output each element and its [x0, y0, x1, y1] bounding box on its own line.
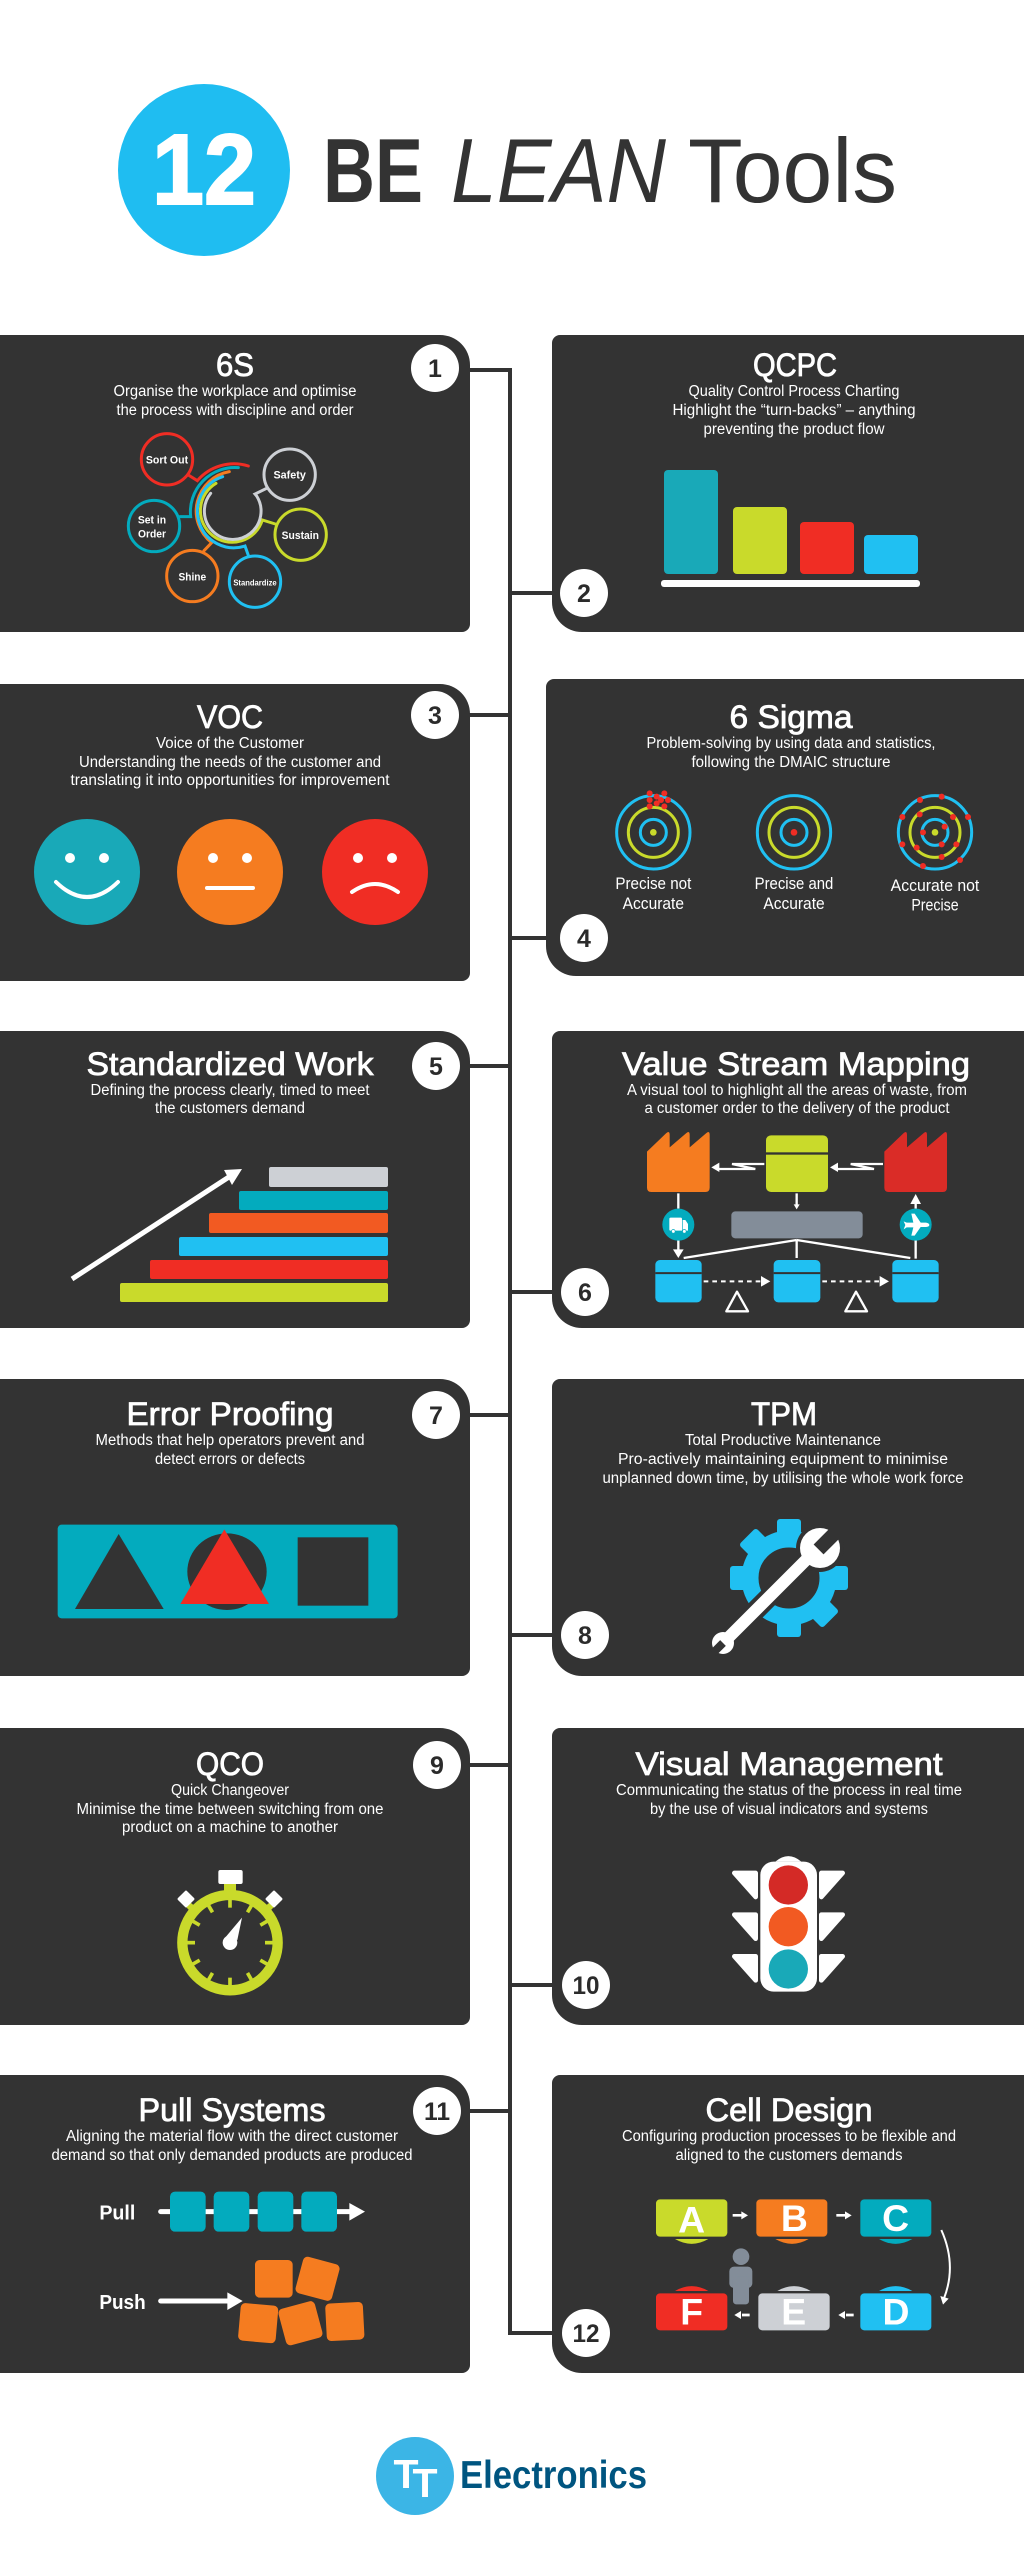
heading: Visual Management: Visual Management — [636, 1746, 943, 1782]
heading: BE LEAN Tools: BE — [323, 121, 423, 222]
icon: sad face — [322, 819, 428, 925]
badge 6 — [561, 1268, 609, 1316]
bar chart — [661, 470, 920, 587]
description: Pull Systems: demand so that only demanded products are produced — [52, 2147, 412, 2164]
logo mark: T — [393, 2451, 419, 2497]
badge 10 — [562, 1961, 610, 2009]
panel: QCPC — [552, 335, 1024, 632]
icon: happy face — [34, 819, 140, 925]
diagram: value stream map — [647, 1132, 947, 1311]
badge 9 — [413, 1741, 461, 1789]
heading: Cell Design: Cell Design — [706, 2092, 872, 2128]
panel: Cell Design — [552, 2075, 1024, 2373]
arrow: rising — [72, 1169, 242, 1279]
description: Error Proofing: detect errors or defects — [155, 1451, 305, 1468]
diagram: 6S wheel: Sort Out — [146, 455, 188, 467]
description: TPM: unplanned down time, by utilising the whole work force — [602, 1470, 964, 1487]
target: precise and accurate — [755, 796, 833, 913]
heading: QCO: QCO — [196, 1746, 264, 1782]
description: TPM: Total Productive Maintenance — [685, 1432, 881, 1449]
panel: 6 Sigma — [546, 679, 1024, 976]
icon: stopwatch — [177, 1870, 283, 1990]
badge 11: 11 — [424, 2098, 450, 2126]
description: QCO: Quick Changeover — [171, 1782, 289, 1799]
target: precise not accurate — [615, 790, 692, 913]
diagram: 6S wheel — [128, 434, 326, 607]
heading: 6S: 6S — [216, 347, 254, 383]
badge 9: 9 — [430, 1752, 444, 1780]
badge 7: 7 — [429, 1402, 443, 1430]
badge 12 — [562, 2309, 610, 2357]
description: 6S — [114, 383, 356, 419]
badge 5 — [412, 1042, 460, 1090]
diagram: pull row — [99, 2192, 365, 2232]
description: Cell Design: Configuring production processes to be flexible and — [622, 2128, 956, 2145]
target: precise and accurate: Accurate — [763, 894, 825, 913]
heading: Error Proofing: Error Proofing — [126, 1396, 334, 1432]
description: Error Proofing: Methods that help operators prevent and — [96, 1432, 364, 1449]
description: Standardized Work — [90, 1082, 370, 1117]
description: Value Stream Mapping: A visual tool to highlight all the areas of waste, from — [627, 1082, 967, 1099]
panel: Visual Management — [552, 1728, 1024, 2025]
diagram: 6S wheel: Set in — [138, 514, 166, 526]
badge 10: 10 — [572, 1972, 600, 2000]
badge 2: 2 — [577, 580, 591, 608]
heading: Standardized Work: Standardized Work — [86, 1046, 375, 1082]
description: Standardized Work: the customers demand — [155, 1100, 305, 1117]
diagram: 6S wheel: Shine — [178, 571, 206, 583]
box dividers — [655, 1270, 939, 1276]
target: accurate not precise: Precise — [911, 896, 959, 915]
panel: 6S — [0, 335, 470, 632]
description: Visual Management — [616, 1782, 962, 1818]
badge 8 — [561, 1611, 609, 1659]
description: 6 Sigma: Problem-solving by using data and statistics, — [646, 735, 936, 752]
panel: Error Proofing — [0, 1379, 470, 1676]
description: QCO — [76, 1782, 384, 1836]
logo mark: T — [412, 2460, 438, 2506]
staircase bars — [120, 1167, 388, 1302]
panel: VOC — [0, 684, 470, 981]
arrowheads — [734, 2211, 949, 2319]
shape sorter diagram — [58, 1525, 398, 1618]
diagram: push row — [99, 2256, 365, 2346]
badge 11 — [413, 2087, 461, 2135]
icon: supplier factory — [647, 1132, 710, 1192]
description: Cell Design: aligned to the customers demands — [676, 2147, 903, 2164]
diagram: 6S wheel: Order — [138, 528, 167, 540]
target: accurate not precise: Accurate not — [891, 876, 980, 895]
description: QCPC — [672, 383, 916, 438]
badge 12: 12 — [572, 2320, 600, 2348]
heading: QCPC: QCPC — [753, 347, 837, 383]
heading: VOC: VOC — [197, 699, 263, 735]
title block — [118, 84, 897, 256]
logo mark — [376, 2437, 454, 2515]
target: precise and accurate: Precise and — [755, 874, 833, 893]
description: VOC — [70, 735, 390, 789]
description: Value Stream Mapping — [627, 1082, 967, 1117]
target: accurate not precise — [891, 794, 980, 915]
description: QCPC: Quality Control Process Charting — [688, 383, 900, 400]
icon: traffic light — [734, 1856, 843, 1992]
info flow arrows — [678, 1164, 916, 1281]
panel: Pull Systems — [0, 2075, 470, 2373]
station pedestals — [675, 2239, 912, 2291]
badge 4: 4 — [577, 925, 591, 953]
stations A to F: A — [678, 2199, 705, 2241]
panel: Value Stream Mapping — [552, 1031, 1024, 1328]
connector timeline — [468, 368, 554, 2335]
description: Visual Management: by the use of visual indicators and systems — [650, 1801, 928, 1818]
description: QCPC: preventing the product flow — [704, 421, 885, 438]
description: 6S: the process with discipline and order — [116, 402, 354, 419]
description: QCPC: Highlight the “turn-backs” – anything — [672, 402, 916, 419]
icon: customer factory — [884, 1132, 947, 1192]
diagram: 6S wheel: Sustain — [282, 530, 319, 542]
heading: Value Stream Mapping: Value Stream Mapping — [622, 1046, 970, 1082]
heading: BE LEAN Tools: LEAN — [451, 121, 666, 222]
description: TPM: Pro-actively maintaining equipment to minimise — [618, 1451, 948, 1468]
diagram: 6S wheel: Standardize — [233, 577, 277, 587]
target: precise not accurate: Accurate — [623, 894, 684, 913]
description: VOC: Voice of the Customer — [156, 735, 304, 752]
badge 8: 8 — [578, 1622, 592, 1650]
description: Error Proofing — [96, 1432, 364, 1468]
diagram: push row: Push — [99, 2292, 146, 2314]
stations A to F: F — [680, 2291, 703, 2333]
process boxes — [655, 1260, 939, 1302]
arrowheads — [673, 1163, 921, 1287]
description: VOC: Understanding the needs of the customer and — [79, 754, 381, 771]
heading: Pull Systems: Pull Systems — [138, 2092, 326, 2128]
flow arrows — [733, 2215, 950, 2315]
stations A to F: B — [781, 2197, 808, 2239]
icon: truck — [662, 1209, 694, 1241]
icon: gear and wrench — [710, 1519, 848, 1656]
icon: neutral face — [177, 819, 283, 925]
panel: TPM — [552, 1379, 1024, 1676]
inventory triangles — [726, 1292, 867, 1311]
heading: BE LEAN Tools — [323, 121, 897, 222]
heading: TPM: TPM — [751, 1396, 817, 1432]
stations A to F — [656, 2197, 931, 2333]
badge 6: 6 — [578, 1279, 592, 1307]
description: Pull Systems: Aligning the material flow with the direct customer — [66, 2128, 398, 2145]
description: TPM — [602, 1432, 964, 1487]
icon: number 12 badge: 12 — [152, 114, 256, 226]
badge 4 — [560, 914, 608, 962]
heading: 6 Sigma: 6 Sigma — [730, 699, 853, 735]
stations A to F: E — [781, 2291, 806, 2333]
panel: QCO — [0, 1728, 470, 2025]
description: QCO: Minimise the time between switching from one — [76, 1801, 384, 1818]
stations A to F: C — [882, 2197, 909, 2239]
description: 6 Sigma: following the DMAIC structure — [692, 754, 890, 771]
badge 7 — [412, 1391, 460, 1439]
description: 6S: Organise the workplace and optimise — [114, 383, 356, 400]
icon: number 12 badge — [118, 84, 290, 256]
logo: TT Electronics — [376, 2437, 647, 2515]
icon: operator — [729, 2248, 752, 2304]
production control box — [766, 1135, 828, 1192]
target: precise not accurate: Precise not — [615, 874, 692, 893]
description: Visual Management: Communicating the status of the process in real time — [616, 1782, 962, 1799]
description: Pull Systems — [52, 2128, 412, 2164]
diagram: 6S wheel: Safety — [273, 470, 306, 482]
badge 5: 5 — [429, 1053, 443, 1081]
logo wordmark: Electronics — [460, 2454, 647, 2497]
badge 1: 1 — [428, 355, 442, 383]
badge 3: 3 — [428, 702, 442, 730]
badge 2 — [560, 569, 608, 617]
process bar — [731, 1211, 863, 1238]
stations A to F: D — [883, 2291, 909, 2333]
description: 6 Sigma — [646, 735, 936, 771]
diagram: cell layout — [656, 2197, 950, 2333]
description: VOC: translating it into opportunities for improvement — [70, 772, 390, 789]
heading: BE LEAN Tools: Tools — [688, 121, 897, 222]
badge 1 — [411, 344, 459, 392]
diagram: pull row: Pull — [99, 2202, 135, 2224]
description: Cell Design — [622, 2128, 956, 2164]
badge 3 — [411, 691, 459, 739]
description: Value Stream Mapping: a customer order to the delivery of the product — [644, 1100, 950, 1117]
icon: plane — [900, 1209, 932, 1241]
panel: Standardized Work — [0, 1031, 470, 1328]
description: QCO: product on a machine to another — [122, 1819, 338, 1836]
description: Standardized Work: Defining the process clearly, timed to meet — [90, 1082, 370, 1099]
